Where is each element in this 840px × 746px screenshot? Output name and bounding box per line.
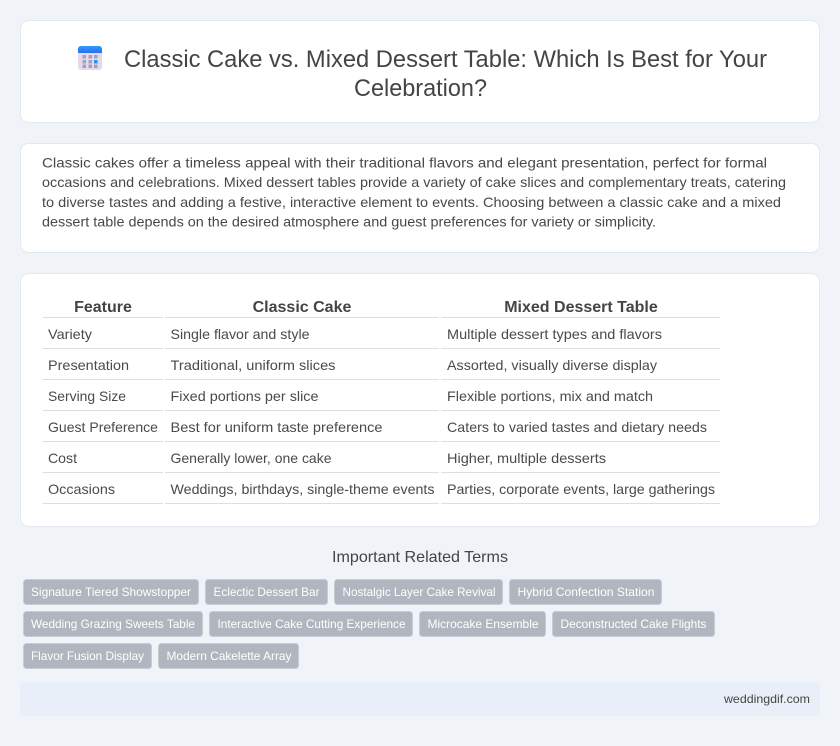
tag (24, 580, 198, 604)
heading: related terms: Important Related Terms (332, 549, 508, 566)
row: cost: Higher, multiple desserts (447, 450, 606, 466)
row: serving size: Flexible portions, mix and match (447, 388, 653, 404)
table header (74, 299, 658, 316)
row: occasions: Parties, corporate events, large gatherings (447, 481, 715, 497)
tag: Signature Tiered Showstopper (31, 585, 191, 599)
panel: title header (20, 20, 820, 122)
row: serving size: Serving Size (48, 388, 126, 404)
tag (552, 612, 714, 636)
table header: Mixed Dessert Table (504, 299, 658, 316)
row: occasions: Occasions (48, 481, 115, 497)
panel: intro text (20, 144, 820, 252)
row: guest preference: Best for uniform taste preference (170, 419, 383, 435)
row: guest preference: Guest Preference (48, 419, 158, 435)
row: serving size (48, 388, 653, 404)
row: occasions (48, 481, 715, 497)
row: presentation (48, 357, 657, 373)
row: serving size: Fixed portions per slice (170, 388, 319, 404)
row: guest preference (48, 419, 707, 435)
title (124, 46, 767, 102)
row: presentation: Assorted, visually diverse display (447, 357, 657, 373)
row: cost (48, 450, 606, 466)
row: variety: Single flavor and style (170, 326, 310, 342)
tag: Interactive Cake Cutting Experience (218, 617, 406, 631)
intro paragraph: to diverse tastes and adding a festive, interactive element to events. Choosing between a classic cake and a mixed (42, 194, 781, 210)
icon: calendar (78, 46, 102, 70)
row: presentation: Presentation (48, 357, 129, 373)
row: variety (48, 326, 662, 342)
intro paragraph: dessert table depends on the desired atmosphere and guest preferences for variety or simplicity. (42, 214, 656, 230)
panel: comparison table (20, 274, 820, 526)
title: Classic Cake vs. Mixed Dessert Table: Which Is Best for Your (124, 46, 767, 73)
tag (510, 580, 662, 604)
title: Celebration? (354, 75, 487, 102)
tag: Hybrid Confection Station (518, 585, 654, 599)
tag: Nostalgic Layer Cake Revival (342, 585, 496, 599)
row: guest preference: Caters to varied tastes and dietary needs (447, 419, 707, 435)
table header: Classic Cake (253, 299, 351, 316)
row: variety: Multiple dessert types and flavors (447, 326, 662, 342)
intro paragraph: occasions and celebrations. Mixed dessert tables provide a variety of cake slices and complementary treats, catering (42, 174, 786, 190)
tag (24, 644, 152, 668)
tag (210, 612, 412, 636)
tag (334, 580, 502, 604)
tag: Modern Cakelette Array (166, 649, 292, 663)
tag: Flavor Fusion Display (31, 649, 144, 663)
tag (158, 644, 298, 668)
footer (20, 682, 820, 716)
table header: Feature (74, 299, 132, 316)
tag: Microcake Ensemble (428, 617, 539, 631)
tag (420, 612, 546, 636)
tag list: related terms (24, 580, 714, 668)
row: cost: Cost (48, 450, 77, 466)
row: occasions: Weddings, birthdays, single-theme events (170, 481, 434, 497)
footer: weddingdif.com (723, 692, 810, 706)
tag (24, 612, 202, 636)
intro paragraph: Classic cakes offer a timeless appeal with their traditional flavors and elegant presentation, perfect for formal (42, 154, 767, 170)
tag (206, 580, 328, 604)
row: variety: Variety (48, 326, 92, 342)
tag: Wedding Grazing Sweets Table (31, 617, 195, 631)
tag: Eclectic Dessert Bar (214, 585, 320, 599)
row: cost: Generally lower, one cake (170, 450, 332, 466)
tag: Deconstructed Cake Flights (560, 617, 706, 631)
row: presentation: Traditional, uniform slices (170, 357, 336, 373)
intro paragraph (42, 154, 786, 230)
